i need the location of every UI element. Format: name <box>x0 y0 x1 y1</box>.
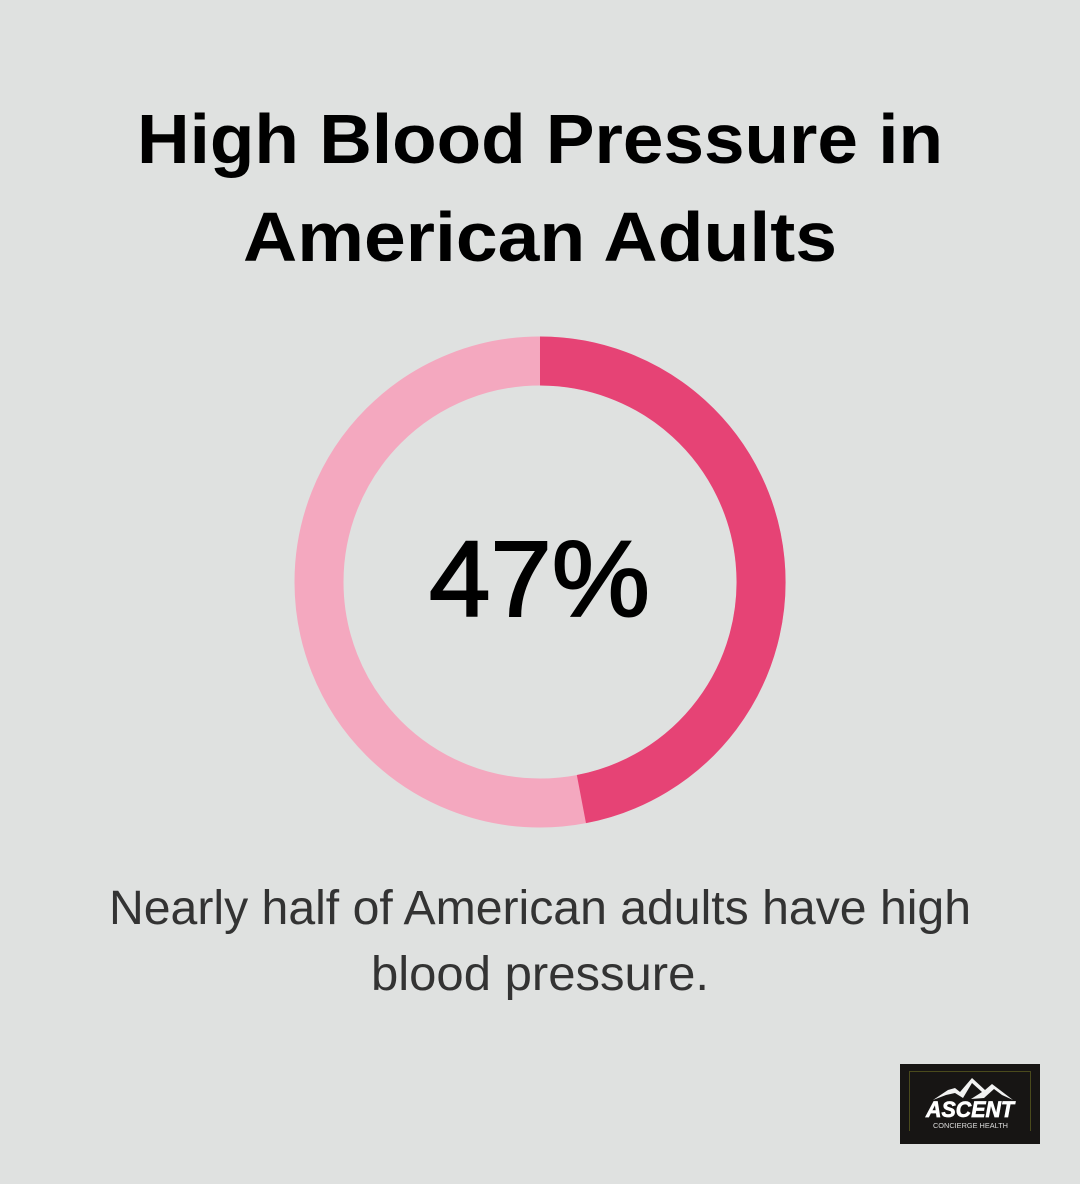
donut chart: 47% <box>319 361 761 803</box>
title <box>137 100 943 276</box>
logo tagline: CONCIERGE HEALTH <box>933 1121 1008 1130</box>
logo mountains <box>933 1078 1013 1100</box>
donut value: 47% <box>429 518 650 639</box>
logo: Ascent Concierge Health <box>900 1064 1040 1144</box>
title: High Blood Pressure in <box>137 100 943 178</box>
description text: Nearly half of American adults have high <box>109 882 971 935</box>
title: American Adults <box>243 198 837 276</box>
description text <box>109 882 971 1001</box>
description text: blood pressure. <box>371 948 709 1001</box>
logo wordmark: ASCENT <box>925 1097 1016 1122</box>
